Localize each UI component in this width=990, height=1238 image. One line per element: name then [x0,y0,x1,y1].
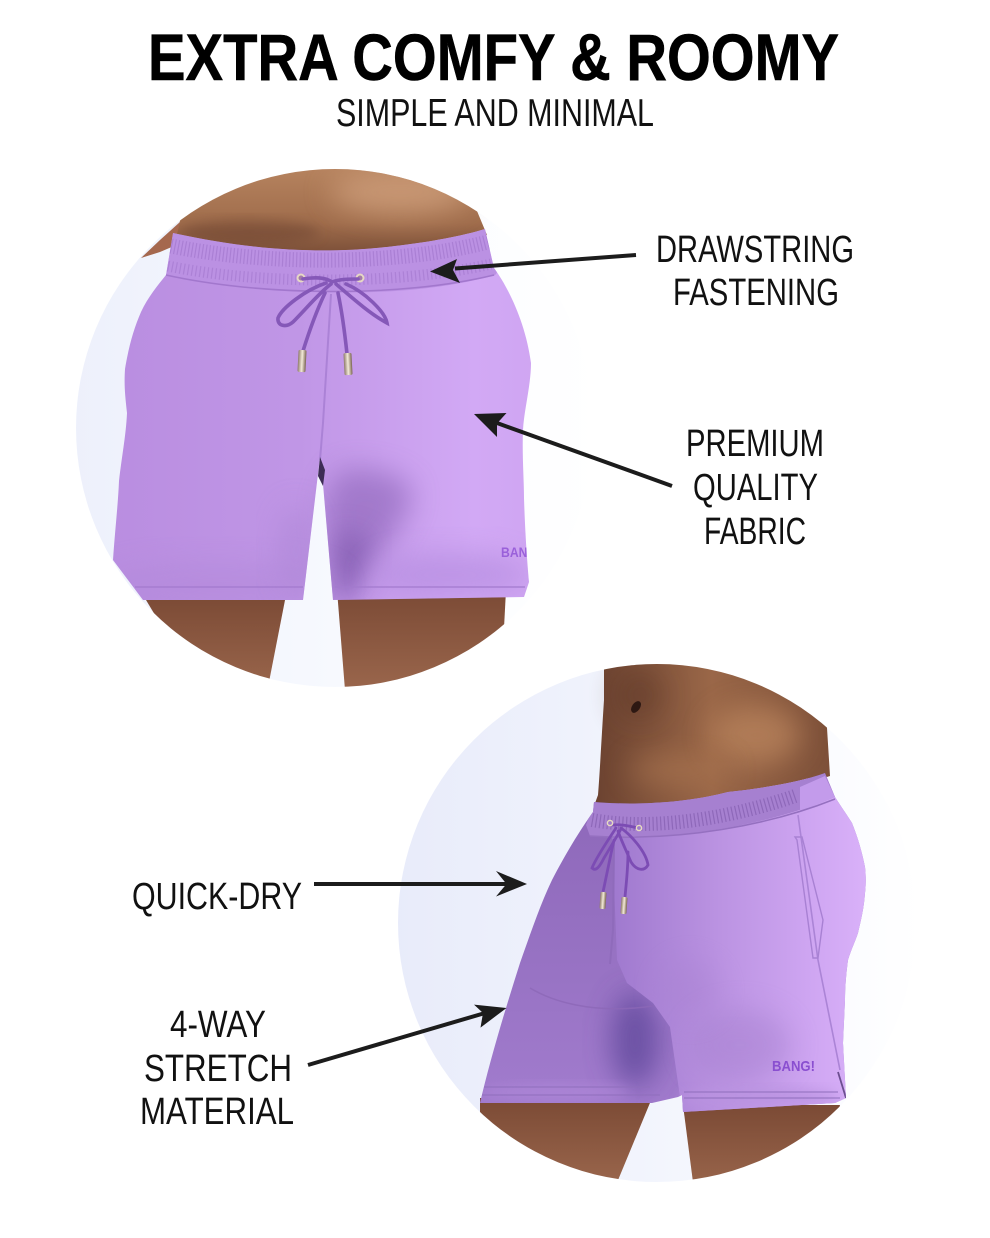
torso [596,664,830,804]
waistband [586,773,835,837]
arrow: quick-dry [314,871,527,896]
aglets [599,892,628,914]
arrow: drawstring [430,255,636,283]
subtitle: SIMPLE AND MINIMAL [336,92,654,135]
front seam [320,294,331,460]
title: EXTRA COMFY & ROOMY [148,20,839,94]
label: 4-way stretch material [140,1004,294,1133]
fly seam [610,842,614,964]
label: 4-way stretch material: 4-WAY [170,1004,266,1046]
navel [631,701,641,713]
left thigh [480,1098,652,1185]
right thigh [338,597,506,687]
logo: BANG! [772,1058,815,1075]
label: drawstring fastening [656,229,854,314]
hem stitch [135,586,525,588]
label: 4-way stretch material: MATERIAL [140,1091,294,1133]
label: premium quality fabric [686,423,824,553]
shorts [470,765,880,1115]
hand [141,222,180,258]
torso [177,169,487,250]
right panel [612,770,880,1115]
leg crease [530,988,653,1009]
drawstring [278,278,387,354]
right thigh [684,1105,840,1180]
leg gap [318,457,325,486]
aglets [297,350,353,375]
label: premium quality fabric: PREMIUM [686,423,824,465]
label: drawstring fastening: FASTENING [673,272,839,314]
waistband [166,229,497,292]
side seam and pocket [798,815,840,1070]
drawstring [592,825,648,897]
label: premium quality fabric: FABRIC [704,511,806,553]
eyelets [298,274,364,282]
arrow: fabric [474,413,672,486]
logo: BANG! [501,544,541,560]
label: premium quality fabric: QUALITY [693,467,818,509]
shorts [100,220,541,610]
label: drawstring fastening: DRAWSTRING [656,229,854,271]
vent slit [838,1072,846,1098]
panel: front view photo circle [76,169,531,687]
label: quick-dry: QUICK-DRY [132,876,302,918]
eyelets [607,820,642,831]
arrow: stretch [308,1005,506,1065]
panel: side view photo circle [398,664,866,1182]
hem stitch [482,1087,840,1098]
label: 4-way stretch material: STRETCH [144,1048,292,1090]
left thigh [146,600,285,679]
